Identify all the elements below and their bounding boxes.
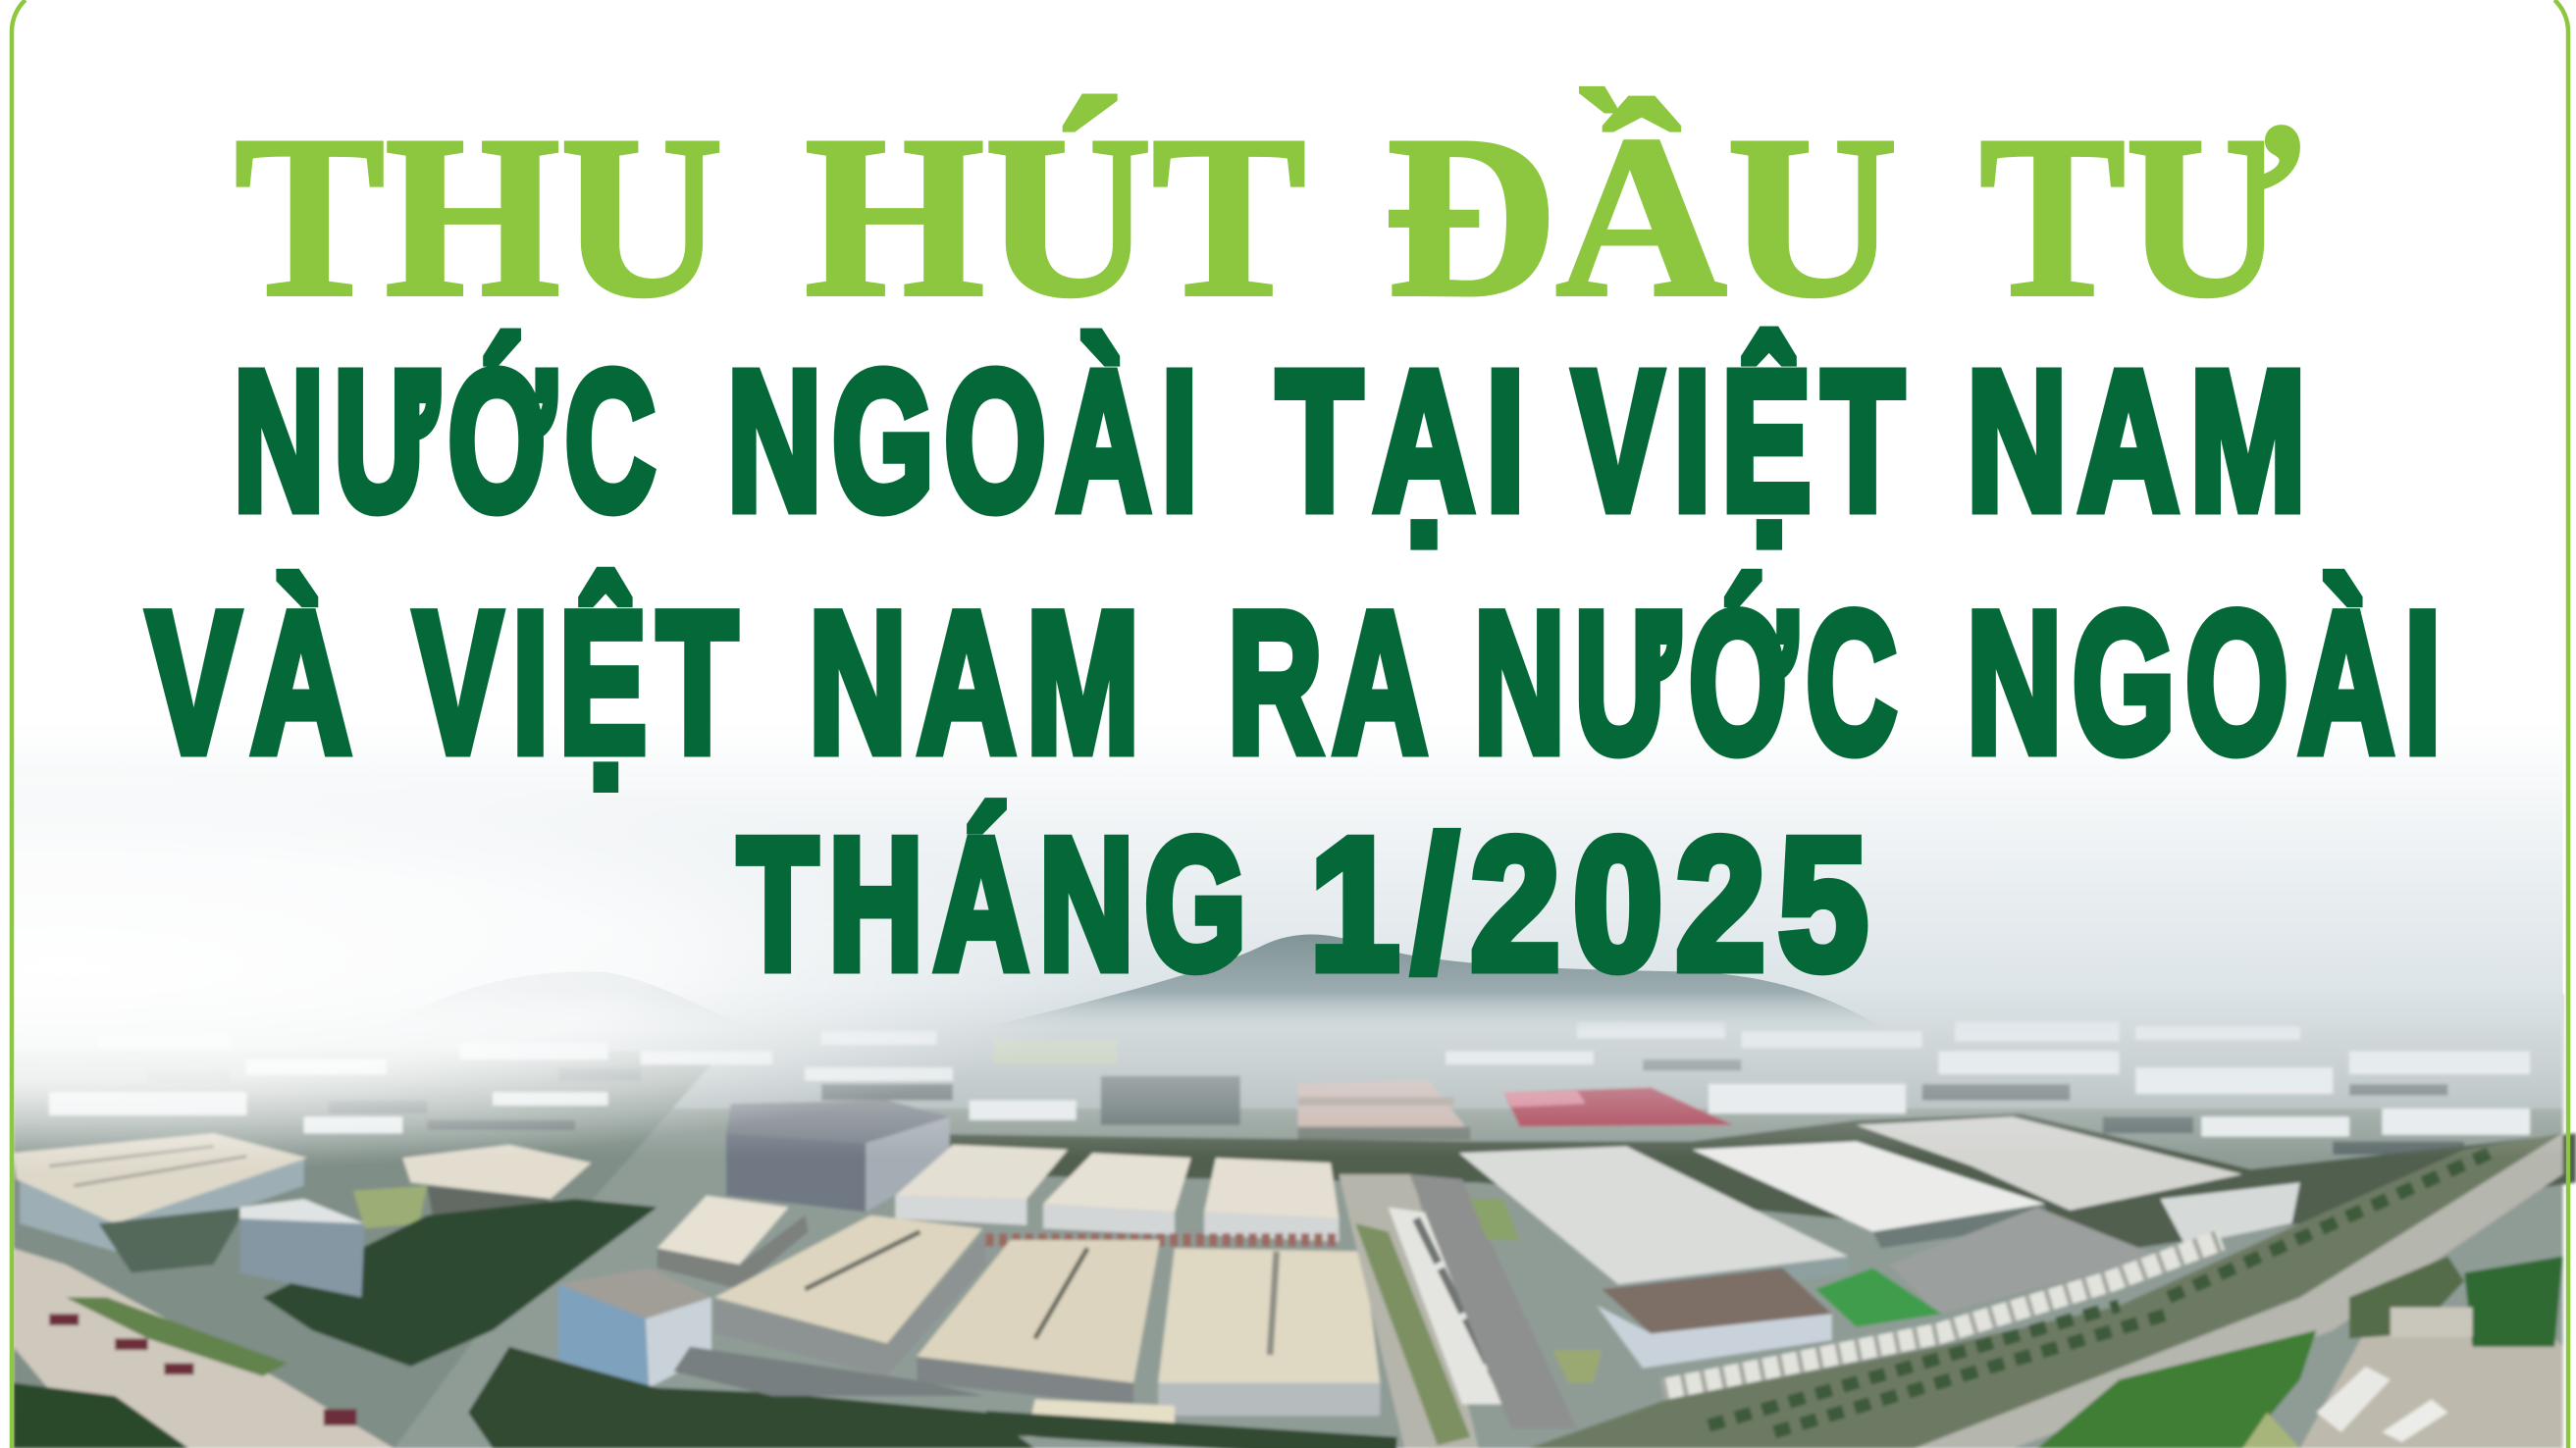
tree clusters left: [263, 1199, 657, 1367]
title line 4: THÁNG: [738, 801, 1257, 1008]
trees along front edge: [985, 1422, 1396, 1448]
white mid building: [657, 1196, 789, 1265]
title line 2: NGOÀI: [727, 330, 1208, 551]
title line 3: RA: [1228, 571, 1438, 795]
title line 2: TẠI: [1277, 330, 1536, 551]
warehouse front right: [1158, 1379, 1380, 1416]
center road: [1339, 1174, 1479, 1448]
striped canopy: [1662, 1240, 2221, 1389]
front right ground with trees: [1528, 1133, 2563, 1448]
title line 1: [235, 88, 2300, 345]
left road: [13, 1248, 394, 1448]
title line 2: NƯỚC: [234, 330, 665, 551]
title line 4: [738, 801, 1881, 1008]
title line 3: [147, 571, 2451, 795]
aerial photo of industrial park: [13, 723, 2576, 1448]
blue office: [558, 1267, 711, 1319]
green field far: [994, 1040, 1117, 1064]
middle white warehouse roof: [1692, 1141, 2045, 1232]
dark roof building: [1602, 1267, 1832, 1333]
far right warehouse roof: [1857, 1116, 2242, 1211]
right trees: [2464, 1257, 2563, 1347]
tree band behind warehouses: [870, 1113, 2576, 1248]
distant mountains: [378, 935, 1889, 1031]
big right warehouse roof: [1459, 1147, 1848, 1284]
warehouse front left roof: [714, 1215, 982, 1343]
dark office tower: [726, 1133, 866, 1212]
far district patches: [49, 1021, 2530, 1136]
small green lawn: [353, 1186, 427, 1228]
title line 2: [234, 330, 2317, 551]
mid left building: [402, 1145, 592, 1199]
small office left: [239, 1215, 365, 1298]
pink striped building: [1298, 1081, 1470, 1136]
title line 1: TƯ: [1979, 89, 2300, 345]
green football field: [1815, 1267, 1942, 1327]
small white block right: [2160, 1182, 2300, 1245]
title line 4: 1/2025: [1310, 801, 1881, 1008]
title line 1: HÚT: [805, 89, 1306, 345]
title line 2: NAM: [1967, 330, 2317, 551]
warehouse front left wall: [714, 1232, 985, 1376]
bottom right site: [2300, 1314, 2563, 1448]
row of warehouses back: [895, 1145, 1068, 1199]
vehicles: [49, 1314, 356, 1425]
row of trucks: [985, 1236, 1339, 1244]
mist over the horizon: [13, 992, 2563, 1158]
bottom right green field: [2037, 1330, 2316, 1448]
rows of roadside trees: [1709, 1150, 2497, 1432]
warehouse front middle: [917, 1357, 1133, 1406]
title line 3: NAM: [809, 571, 1150, 795]
diagonal main road: [1914, 1133, 2563, 1448]
red building: [1503, 1087, 1733, 1126]
title line 2: VIỆT: [1573, 330, 1915, 551]
title line 1: THU: [235, 89, 723, 345]
factory ground and buildings: [13, 994, 2576, 1448]
left warehouse wall: [20, 1158, 304, 1252]
trees below warehouses: [468, 1347, 1035, 1448]
parking yard: [1889, 1207, 2160, 1314]
green lawn center: [1470, 1199, 1520, 1240]
left warehouse roof: [13, 1133, 307, 1223]
title line 3: NƯỚC: [1474, 571, 1907, 795]
title line 3: VIỆT: [414, 571, 748, 795]
left side haze: [13, 763, 1147, 1174]
title line 1: ĐẦU: [1385, 88, 1898, 345]
left ground: [13, 1051, 723, 1448]
title line 3: VÀ: [147, 571, 362, 795]
